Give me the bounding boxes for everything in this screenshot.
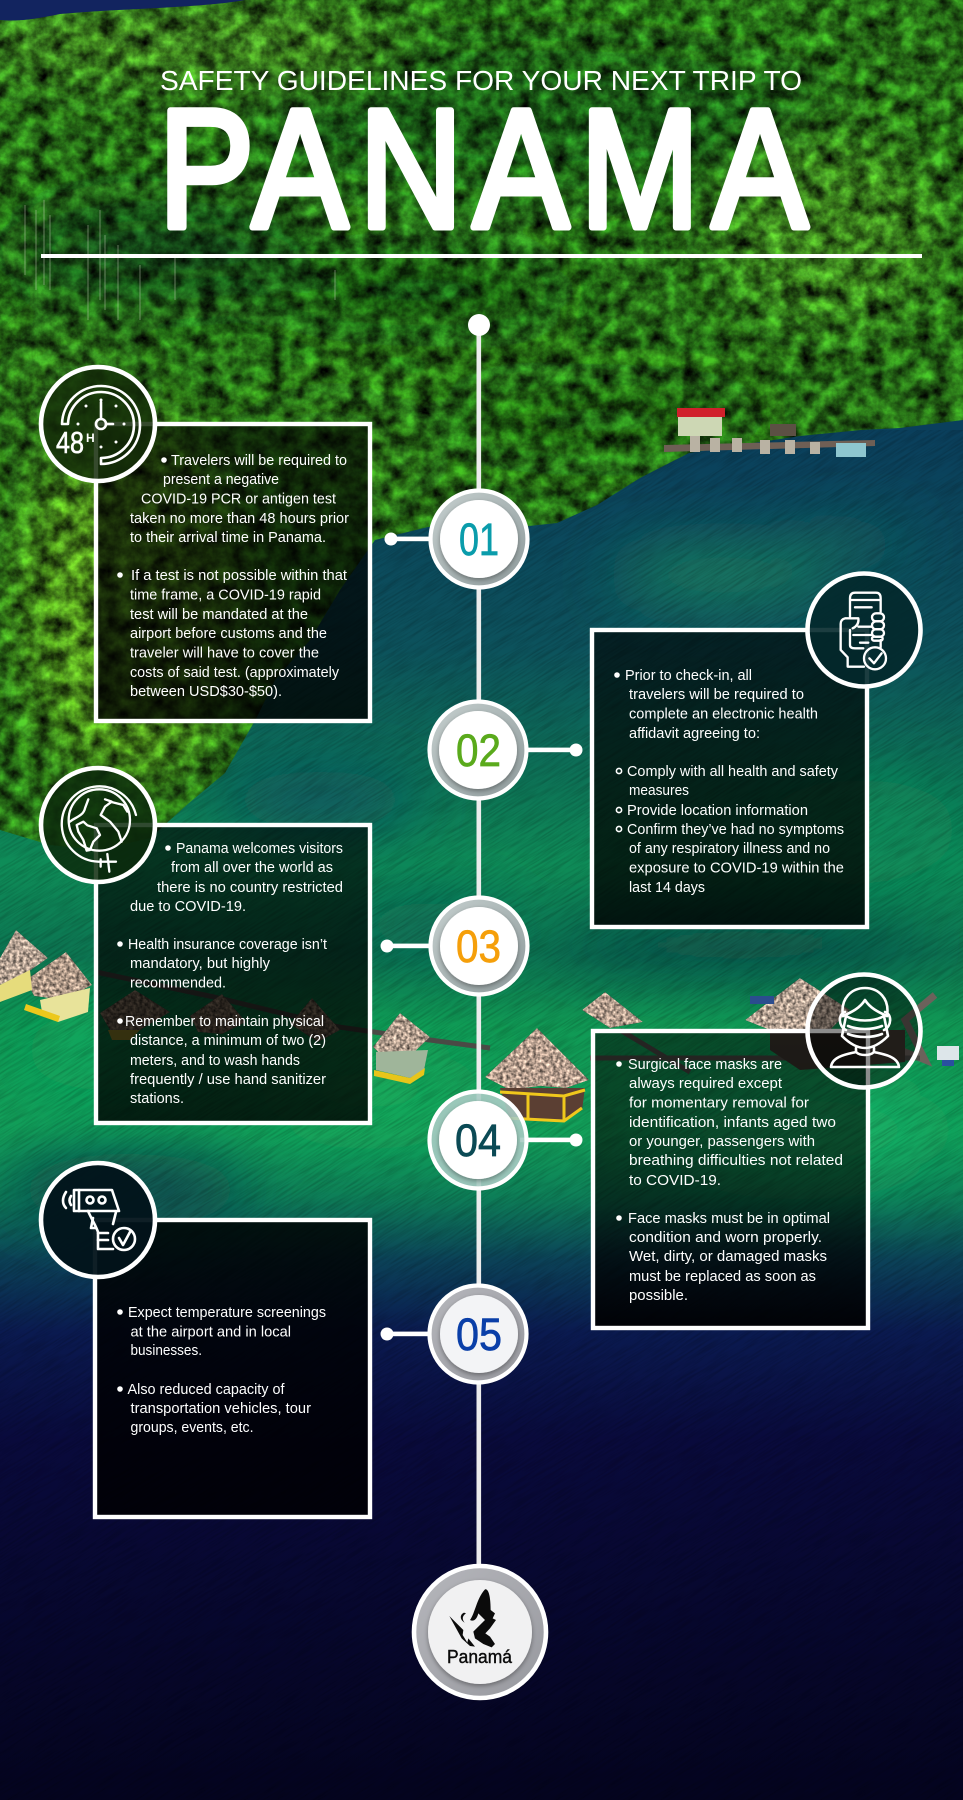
panel 2 text: last 14 days xyxy=(629,880,705,896)
red-roofed pier house xyxy=(664,408,875,457)
node 02: 02 xyxy=(456,725,501,776)
icon: phone with check xyxy=(808,574,920,686)
panel 2 text: Comply with all health and safety xyxy=(627,764,839,780)
panel 3 text: from all over the world as xyxy=(171,860,333,876)
panel 2 text: measures xyxy=(629,783,689,799)
panel 3 text: due to COVID-19. xyxy=(130,899,246,915)
panel 1 text: time frame, a COVID-19 rapid xyxy=(130,588,321,604)
logo mark xyxy=(449,1589,496,1647)
timeline spine xyxy=(468,314,490,1571)
node 03: 03 xyxy=(456,921,501,972)
panel 1 text: costs of said test. (approximately xyxy=(130,665,340,681)
node 04 xyxy=(430,1092,582,1188)
Panamá tourism logo badge xyxy=(414,1566,546,1698)
panel 1 text: traveler will have to cover the xyxy=(130,646,319,662)
panel 2 text: of any respiratory illness and no xyxy=(629,841,830,857)
logo wordmark: Panamá xyxy=(447,1647,513,1667)
forest tree trunks xyxy=(25,200,335,320)
panel 4 text: possible. xyxy=(629,1288,688,1304)
icon: person wearing a face mask xyxy=(808,974,920,1088)
panel 1 text: COVID-19 PCR or antigen test xyxy=(141,492,336,508)
panel 2 text: exposure to COVID-19 within the xyxy=(629,860,844,876)
panel 3 text: stations. xyxy=(130,1091,184,1107)
panel 1 text: If a test is not possible within that xyxy=(131,568,347,584)
node 04: 04 xyxy=(455,1115,501,1166)
panel 5 text xyxy=(117,1305,326,1436)
panel 3 text: Remember to maintain physical xyxy=(125,1014,324,1030)
panel 4 text: Surgical face masks are xyxy=(628,1057,782,1073)
panel 4 text: condition and worn properly. xyxy=(629,1230,822,1246)
title rule xyxy=(41,254,922,258)
panel 3 text: distance, a minimum of two (2) xyxy=(130,1033,326,1049)
panel 3 text: meters, and to wash hands xyxy=(130,1053,300,1069)
panel 4 text: Face masks must be in optimal xyxy=(628,1211,830,1227)
node 01 xyxy=(384,490,528,588)
panel 5 text: groups, events, etc. xyxy=(130,1420,254,1436)
panel 2 text: Prior to check-in, all xyxy=(625,668,752,684)
panel 4: face masks xyxy=(593,1031,868,1328)
panel 2 text: complete an electronic health xyxy=(629,706,818,722)
panel 1 text: taken no more than 48 hours prior xyxy=(130,511,349,527)
panel 5 text: businesses. xyxy=(130,1343,202,1359)
icon: 48-hour clock: 48 xyxy=(56,425,84,460)
panel 1 text: present a negative xyxy=(163,472,279,488)
panel 2: electronic health affidavit xyxy=(592,630,867,927)
panel 4 text: must be replaced as soon as xyxy=(629,1269,816,1285)
panel 4 text: to COVID-19. xyxy=(629,1173,721,1189)
panel 4 text: Wet, dirty, or damaged masks xyxy=(629,1249,827,1265)
panel 2 text: affidavit agreeing to: xyxy=(629,726,760,742)
panel 4 text: or younger, passengers with xyxy=(629,1134,815,1150)
panel 3: entry and insurance xyxy=(96,825,370,1123)
boardwalks xyxy=(96,972,935,1072)
panel 3 text xyxy=(117,841,343,1107)
panel 1 text: to their arrival time in Panama. xyxy=(130,530,326,546)
overwater huts xyxy=(0,930,959,1122)
node 03 xyxy=(380,898,528,994)
panel 5 text: transportation vehicles, tour xyxy=(130,1401,311,1417)
panel 3 text: there is no country restricted xyxy=(157,880,343,896)
panel 4 text xyxy=(616,1057,843,1304)
icon: 48-hour clock: H xyxy=(86,431,95,445)
panel 3 text: Health insurance coverage isn’t xyxy=(128,937,327,953)
panel 2 text: Provide location information xyxy=(627,803,808,819)
icon: infrared thermometer with check xyxy=(41,1163,155,1277)
panel 5 text: Expect temperature screenings xyxy=(128,1305,326,1321)
node 05 xyxy=(380,1286,526,1382)
panel 1 text xyxy=(117,453,349,700)
panel 3 text: Panama welcomes visitors xyxy=(176,841,343,857)
subtitle: SAFETY GUIDELINES FOR YOUR NEXT TRIP TO xyxy=(160,65,802,96)
icon: 48-hour clock xyxy=(41,367,155,481)
top-left sliver of sea xyxy=(0,0,245,21)
panel 1 text: test will be mandated at the xyxy=(130,607,308,623)
node 02 xyxy=(430,702,582,798)
panel 5 text: at the airport and in local xyxy=(130,1324,291,1340)
panel 1: testing requirement xyxy=(96,424,370,721)
panel 5: temperature screening xyxy=(95,1220,370,1517)
panel 1 text: airport before customs and the xyxy=(130,626,327,642)
panel 3 text: mandatory, but highly xyxy=(130,956,271,972)
panel 3 text: frequently / use hand sanitizer xyxy=(130,1072,326,1088)
node 05: 05 xyxy=(456,1309,502,1360)
panel 2 text: travelers will be required to xyxy=(629,687,804,703)
panel 2 text: Confirm they’ve had no symptoms xyxy=(627,822,844,838)
node 01: 01 xyxy=(459,514,499,565)
panel 1 text: Travelers will be required to xyxy=(171,453,347,469)
panel 2 text xyxy=(614,668,844,896)
panel 4 text: breathing difficulties not related xyxy=(629,1153,843,1169)
panel 1 text: between USD$30-$50). xyxy=(130,684,282,700)
title: PANAMA xyxy=(158,75,808,264)
icon: globe with plane xyxy=(41,768,155,882)
panel 4 text: for momentary removal for xyxy=(629,1096,809,1112)
panel 4 text: always required except xyxy=(629,1076,782,1092)
panel 4 text: identification, infants aged two xyxy=(629,1115,836,1131)
panel 5 text: Also reduced capacity of xyxy=(128,1382,285,1398)
panel 3 text: recommended. xyxy=(130,976,226,992)
